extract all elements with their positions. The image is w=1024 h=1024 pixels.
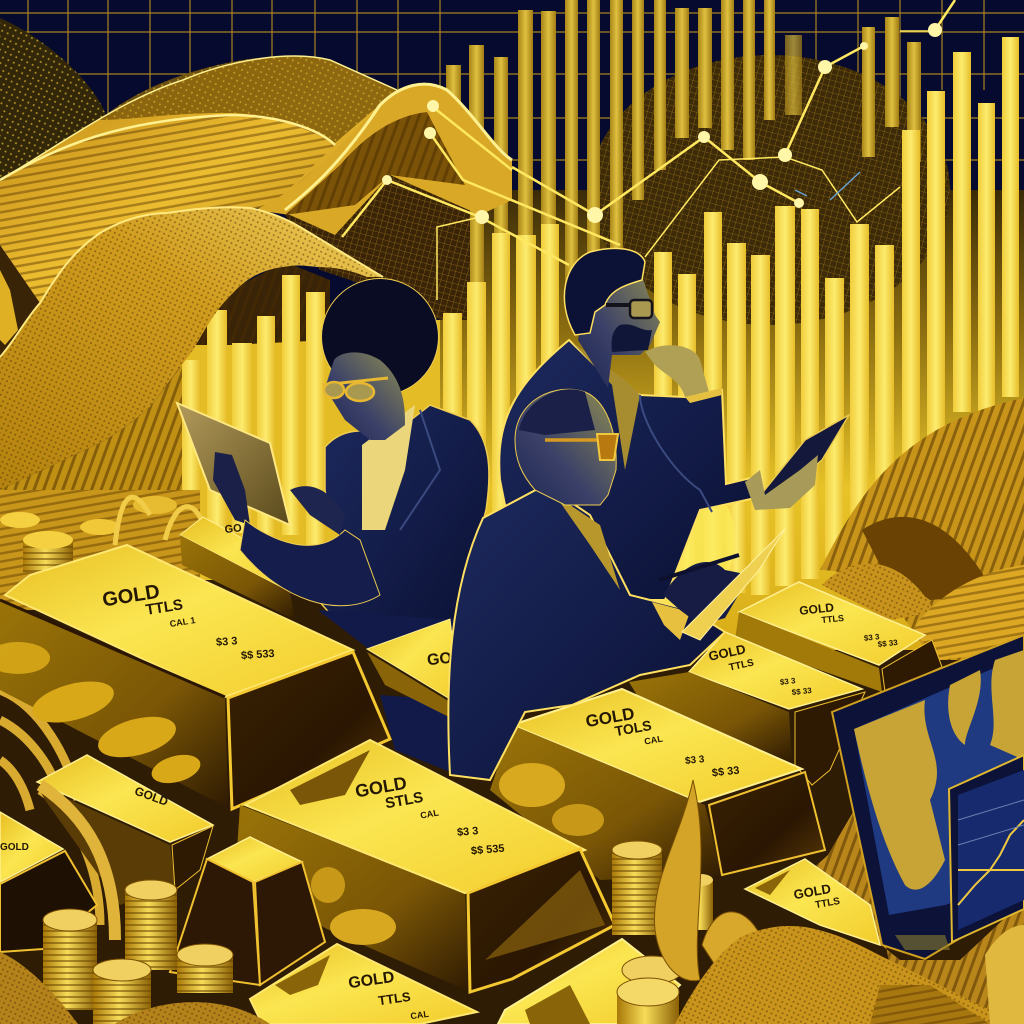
gold wires and coins behind left bars (0, 490, 205, 610)
gold bar: right middle: TTLS (728, 658, 755, 674)
dotted dark sphere top left (0, 18, 106, 178)
face (325, 352, 405, 440)
dark cave behind left waves (0, 110, 470, 360)
gold bar: center large: CAL (420, 807, 440, 821)
gold bar: right middle: $3 3 (780, 676, 796, 687)
hand on tablet (745, 455, 818, 510)
gold bar: near monitor (745, 859, 880, 945)
gold bar: center right: $3 3 (684, 754, 705, 767)
gold bar: back right: $$ 33 (877, 638, 899, 649)
gold cube (170, 837, 325, 985)
gold bar: small left: GOLD (133, 784, 170, 809)
monitor with world map (832, 635, 1024, 959)
neck and face (578, 265, 660, 388)
back bar chart (446, 0, 921, 331)
gold bar: bottom center: GOLD (347, 969, 395, 992)
glasses (545, 438, 600, 442)
gold bar: back left (180, 517, 297, 620)
gold bar: right middle (629, 632, 865, 785)
gold bar: center right: GOLD (584, 704, 636, 731)
gold bar: bottom left edge (0, 812, 97, 952)
dark mesh blob behind right chart (590, 55, 950, 325)
blonde wires over small bar (40, 785, 115, 940)
coin stacks left (43, 880, 233, 1024)
paper (682, 529, 785, 640)
gold flame swirl (654, 780, 760, 981)
gold bar: right middle: GOLD (707, 641, 747, 664)
gold bar: center large (235, 740, 615, 992)
gold bar: large left: CAL 1 (169, 615, 196, 629)
gold dotted swirl bottom right (675, 925, 1024, 1024)
gold bar: center back: GO (426, 650, 453, 669)
gold bar: back right: GOLD (799, 600, 835, 618)
gold bar: bottom right of center (498, 939, 680, 1024)
jacket (499, 340, 760, 600)
left hand (213, 452, 250, 525)
analyst: bald with glasses in front (448, 389, 785, 780)
laptop (177, 403, 290, 525)
jacket (318, 405, 489, 640)
gold bar: small left (37, 755, 213, 905)
coin stacks center right (612, 841, 713, 1024)
gold bar: back right (735, 582, 942, 692)
gold bar: bottom left edge: GOLD (0, 842, 29, 853)
glasses (322, 378, 388, 385)
gold wave: striped fold to upper right (255, 84, 512, 235)
trend line with glowing points (342, 0, 955, 300)
gold bar: center large: $$ 535 (470, 843, 505, 857)
gold wave: upper left striped band (0, 56, 397, 303)
gold dotted humps bottom left (0, 952, 270, 1024)
gold bar: near monitor: GOLD (792, 881, 832, 902)
analyst: afro hair with laptop (177, 278, 489, 640)
gold bar: center back (367, 619, 460, 720)
jacket (448, 485, 725, 780)
gold wave: middle left dotted band (0, 207, 383, 510)
gold bar: bottom center (250, 944, 477, 1024)
glow behind front figures (595, 465, 735, 615)
gold bar: back right: TTLS (821, 613, 844, 625)
gold bar: large left: $3 3 (216, 635, 238, 649)
gold bar: large left: TTLS (144, 596, 184, 619)
analyst: standing with tablet and beard (499, 248, 849, 600)
gold bar: large left: GOLD (101, 581, 161, 611)
gold wires bottom right (800, 800, 1024, 1024)
gold wave: right (820, 398, 1024, 660)
hand at chin (645, 345, 709, 397)
cuff and hand (652, 602, 690, 640)
gold bar: back left: GO (224, 522, 243, 536)
gold bar: center large: STLS (384, 789, 425, 812)
gold bar: back right: $3 3 (864, 632, 880, 643)
gold bar: large left (0, 545, 390, 809)
gold bar: right middle: $$ 33 (791, 686, 813, 697)
pen (659, 555, 739, 580)
gold bar: center right: TOLS (613, 717, 653, 739)
afro (321, 278, 439, 396)
gold bar: bottom center: CAL (410, 1009, 430, 1021)
gold bar: large left: $$ 533 (241, 648, 275, 662)
coil left edge (0, 270, 18, 345)
second screen with chart (949, 755, 1024, 942)
gold bar: center right: CAL (644, 733, 664, 747)
gold bar: center large: GOLD (354, 773, 408, 801)
analyst legs (318, 610, 455, 772)
blonde wires left (0, 690, 115, 940)
gold bar: center large: $3 3 (457, 825, 479, 839)
gold bar: bottom center: TTLS (377, 989, 412, 1008)
head (515, 389, 616, 505)
gold bar: center right (490, 689, 825, 880)
tablet (759, 415, 849, 500)
gold bar: center right: $$ 33 (711, 765, 740, 779)
front bar chart (182, 37, 1019, 595)
arm and right hand (240, 520, 380, 606)
gold bar: near monitor: TTLS (814, 896, 841, 911)
glasses (606, 303, 652, 307)
hair (564, 248, 645, 335)
